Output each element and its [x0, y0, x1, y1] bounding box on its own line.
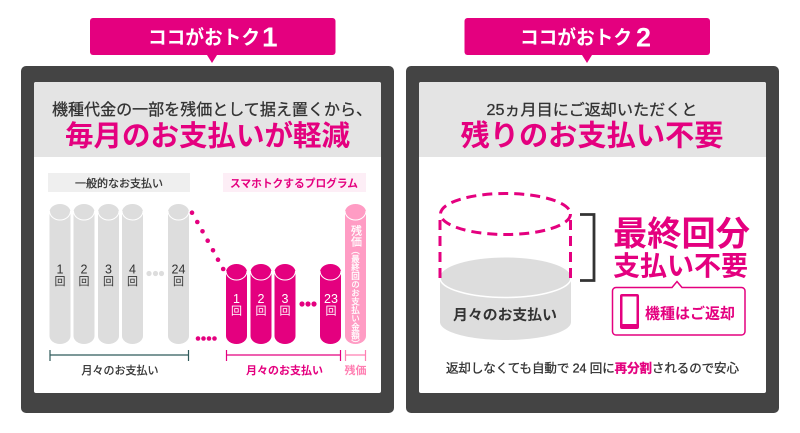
bracket: program monthly — [226, 350, 340, 377]
panel: monthly payment reduced — [21, 66, 394, 413]
cylinder 3: 回 — [103, 275, 114, 288]
tag: ココがおトク2: ココがおトク — [520, 26, 632, 49]
note: 返却しなくても自動で 24 回に再分割されるので安心 — [446, 360, 739, 376]
cylinder 2 — [250, 264, 272, 344]
heading line 2: 毎月のお支払いが軽減 — [65, 120, 350, 152]
cylinder 3: 3 — [105, 262, 112, 276]
label: program: スマホトクするプログラム — [230, 176, 358, 190]
cylinder 2: 2 — [258, 292, 265, 306]
icon: smartphone — [620, 294, 639, 329]
bracket: general monthly: 月々のお支払い — [82, 363, 158, 377]
cylinder 24: 24 — [172, 262, 185, 276]
cylinder 1: 1 — [57, 262, 64, 276]
heading line 1: 機種代金の一部を残価として据え置くから、 — [52, 101, 372, 119]
bracket: residual: 残価 — [344, 363, 366, 377]
panel header — [34, 82, 381, 157]
ellipsis dots — [146, 271, 164, 276]
heading line 1: 25ヵ月目にご返却いただくと — [486, 101, 698, 119]
cylinder 3: 3 — [282, 292, 289, 306]
bracket — [580, 214, 594, 280]
cylinder 24: 回 — [173, 275, 184, 288]
dotted line: bottom — [196, 336, 217, 341]
cylinder 4: 4 — [129, 262, 136, 276]
cylinder 23: 23 — [324, 292, 338, 306]
cylinder 1: 1 — [233, 292, 240, 306]
bracket: general monthly — [50, 350, 188, 377]
callout: final payment: 最終回分 — [613, 216, 750, 254]
cylinder 23 — [320, 264, 341, 344]
cylinder: monthly payment: 月々のお支払い — [453, 306, 557, 324]
cylinder 1 — [226, 264, 247, 344]
tag: ココがおトク1: ココがおトク — [148, 26, 260, 49]
cylinder 2: 2 — [81, 262, 88, 276]
label: general payment — [48, 173, 190, 192]
cylinder 4 — [122, 204, 143, 344]
panel header — [419, 82, 766, 157]
panel: remaining payment not needed — [406, 66, 779, 413]
cylinder 4: 回 — [127, 275, 138, 288]
chart: program 23 payments and residual — [226, 204, 366, 348]
cylinder 1: 回 — [231, 304, 242, 318]
ellipsis dots — [299, 301, 317, 307]
label: program — [223, 173, 366, 192]
tag: ココがおトク2 — [464, 18, 710, 63]
cylinder residual — [345, 204, 366, 348]
cylinder 2 — [74, 204, 94, 344]
dashed cylinder: final payment — [440, 194, 570, 280]
cylinder 2: 回 — [78, 275, 90, 288]
label: general payment: 一般的なお支払い — [75, 176, 163, 190]
cylinder 2: 回 — [256, 304, 266, 318]
heading line 2: 残りのお支払い不要 — [460, 120, 724, 152]
speech box: return device: 機種はご返却 — [645, 304, 735, 322]
cylinder 3 — [98, 204, 119, 344]
cylinder: monthly payment — [440, 258, 571, 340]
cylinder residual: 残価 — [350, 224, 362, 247]
dotted arrow: diagonal — [190, 210, 226, 271]
cylinder 1 — [50, 204, 70, 344]
tag: ココがおトク1 — [90, 18, 336, 63]
tag: ココがおトク2: 2 — [636, 22, 651, 52]
speech box: return device — [612, 282, 745, 335]
callout: no payment needed: 支払い不要 — [613, 252, 748, 282]
tag: ココがおトク1: 1 — [262, 22, 278, 52]
cylinder residual: （最終回のお支払い金額） — [350, 246, 360, 348]
chart: general 24 payments — [50, 204, 189, 344]
cylinder 24 — [168, 204, 189, 344]
cylinder 23: 回 — [326, 304, 336, 318]
bracket: residual — [344, 350, 366, 377]
bracket: program monthly: 月々のお支払い — [246, 363, 323, 377]
cylinder 3 — [274, 264, 296, 344]
cylinder 1: 回 — [54, 275, 66, 288]
cylinder 3: 回 — [280, 304, 290, 318]
